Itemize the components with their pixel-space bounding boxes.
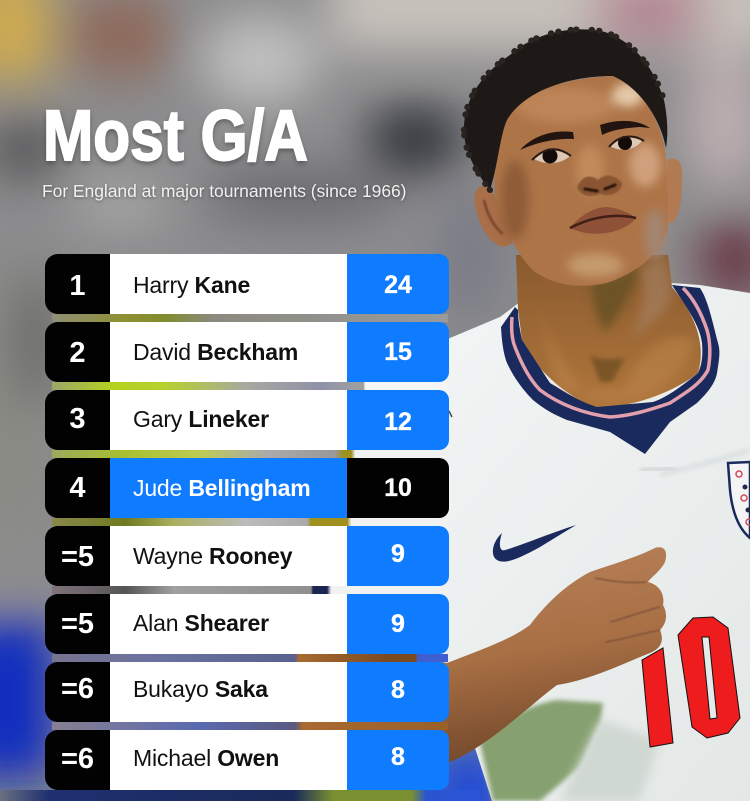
mouth	[570, 207, 636, 234]
table row 2: David Beckham: 2	[69, 337, 86, 369]
table row 6: Alan Shearer: Alan Shearer	[133, 610, 269, 636]
table row 2: David Beckham: 15	[384, 338, 412, 366]
table row 4: Jude Bellingham highlighted: 10	[384, 474, 412, 502]
arm and hand	[298, 547, 666, 790]
table row 5: Wayne Rooney	[45, 526, 449, 586]
player	[298, 29, 750, 801]
table row 7: Bukayo Saka: =6	[61, 673, 94, 705]
strips of photo visible between rows	[0, 314, 480, 801]
right ear	[664, 159, 682, 223]
table row 8: Michael Owen: =6	[61, 743, 94, 775]
table row 7: Bukayo Saka: 8	[391, 676, 405, 704]
collar	[501, 285, 719, 454]
table row 7: Bukayo Saka: Bukayo Saka	[133, 676, 268, 702]
hair	[464, 29, 667, 190]
table row 1: Harry Kane: 1	[69, 270, 86, 302]
table row 1: Harry Kane: Harry Kane	[133, 272, 250, 298]
table row 1: Harry Kane	[45, 254, 449, 314]
table row 2: David Beckham: David Beckham	[133, 339, 298, 365]
subtitle: For England at major tournaments (since 1966)	[42, 181, 406, 201]
table row 4: Jude Bellingham highlighted: Jude Bellingham	[133, 475, 311, 501]
table row 5: Wayne Rooney: 9	[391, 540, 405, 568]
table row 1: Harry Kane: 24	[384, 271, 412, 299]
table row 3: Gary Lineker	[45, 390, 449, 450]
shirt number 10	[642, 617, 740, 747]
table row 3: Gary Lineker: Gary Lineker	[133, 406, 269, 432]
table row 8: Michael Owen: Michael Owen	[133, 745, 279, 771]
table row 6: Alan Shearer: 9	[391, 610, 405, 638]
eyes	[532, 136, 644, 164]
table row 8: Michael Owen	[45, 730, 449, 790]
crest	[728, 462, 750, 538]
table row 6: Alan Shearer	[45, 594, 449, 654]
table row 3: Gary Lineker: 3	[69, 403, 86, 435]
face	[494, 76, 668, 286]
table row 5: Wayne Rooney: Wayne Rooney	[133, 543, 292, 569]
shirt sleeve fold	[424, 382, 452, 417]
left ear	[474, 186, 513, 246]
table row 4: Jude Bellingham highlighted: 4	[69, 472, 86, 504]
shirt body and sleeve	[326, 283, 750, 801]
nose	[577, 176, 622, 196]
collar stripe	[512, 288, 710, 417]
swoosh	[493, 525, 576, 562]
table row 3: Gary Lineker: 12	[384, 408, 412, 436]
face highlights	[501, 83, 665, 277]
title: Most G/A	[43, 97, 308, 176]
table row 6: Alan Shearer: =5	[61, 608, 94, 640]
shirt creases and shadow	[480, 700, 603, 801]
table row 7: Bukayo Saka	[45, 662, 449, 722]
neck	[516, 255, 701, 408]
table row 5: Wayne Rooney: =5	[61, 541, 94, 573]
table row 8: Michael Owen: 8	[391, 743, 405, 771]
eyebrows	[520, 132, 574, 150]
table row 2: David Beckham	[45, 322, 449, 382]
table row 4: Jude Bellingham highlighted	[45, 458, 449, 518]
